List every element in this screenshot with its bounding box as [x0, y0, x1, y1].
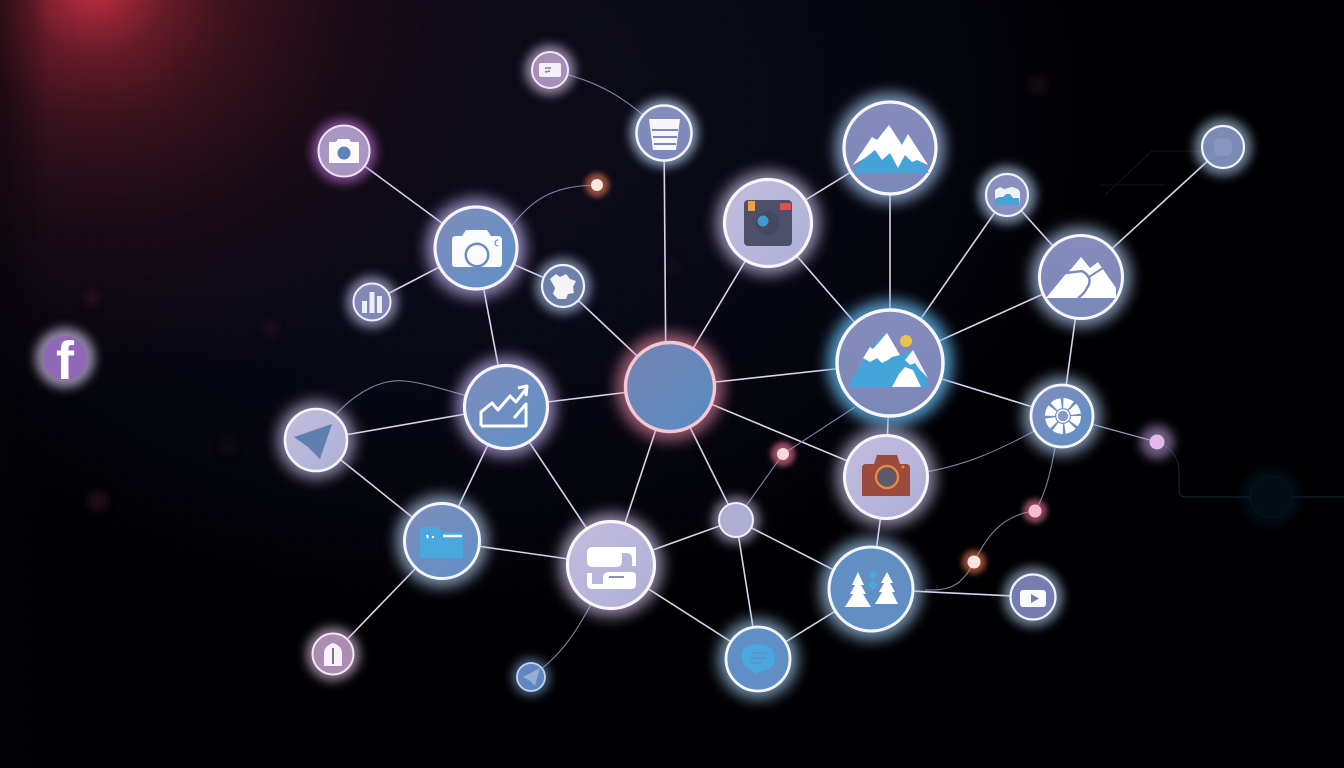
- node: small camera right: [978, 166, 1036, 224]
- circuit trace: faint upper right: [1100, 151, 1205, 195]
- node: small top card: [525, 45, 575, 95]
- node: purple camera: [312, 119, 376, 183]
- node: folder: [396, 495, 488, 587]
- thin curved connections: [316, 70, 1062, 677]
- node: grey junction: [712, 496, 760, 544]
- node: pink dot right: [1023, 499, 1047, 523]
- node: big mountain: [827, 300, 953, 426]
- node: right mountain: [1031, 227, 1131, 327]
- node: bug: [535, 258, 591, 314]
- straight connection lines: [316, 133, 1223, 659]
- node: top right: [1194, 118, 1252, 176]
- node: white camera: [426, 198, 526, 298]
- node: instagram style camera: [716, 171, 820, 275]
- node: small plane: [512, 658, 550, 696]
- node: paper plane: [277, 401, 355, 479]
- node: small info: [306, 627, 360, 681]
- node: video: [1003, 567, 1063, 627]
- node: bar chart: [346, 276, 398, 328]
- node: route: [559, 513, 663, 617]
- node: pink dot lower: [962, 550, 986, 574]
- node: pink dot on line: [771, 442, 795, 466]
- text: f logo: f: [56, 331, 75, 391]
- circuit trace: faint lower right with dim node: [1157, 442, 1344, 527]
- node: top mountain: [835, 93, 945, 203]
- node: trees: [820, 538, 922, 640]
- node: speech bubble: [718, 619, 798, 699]
- node: cup list: [630, 99, 698, 167]
- node: orange camera: [836, 427, 936, 527]
- node: end dot upper: [585, 173, 609, 197]
- node: purple dot far right: [1140, 425, 1174, 459]
- node: central hub: [616, 333, 724, 441]
- node: facebook: [35, 328, 95, 391]
- node: gear: [1023, 377, 1101, 455]
- node: growth chart: [456, 357, 556, 457]
